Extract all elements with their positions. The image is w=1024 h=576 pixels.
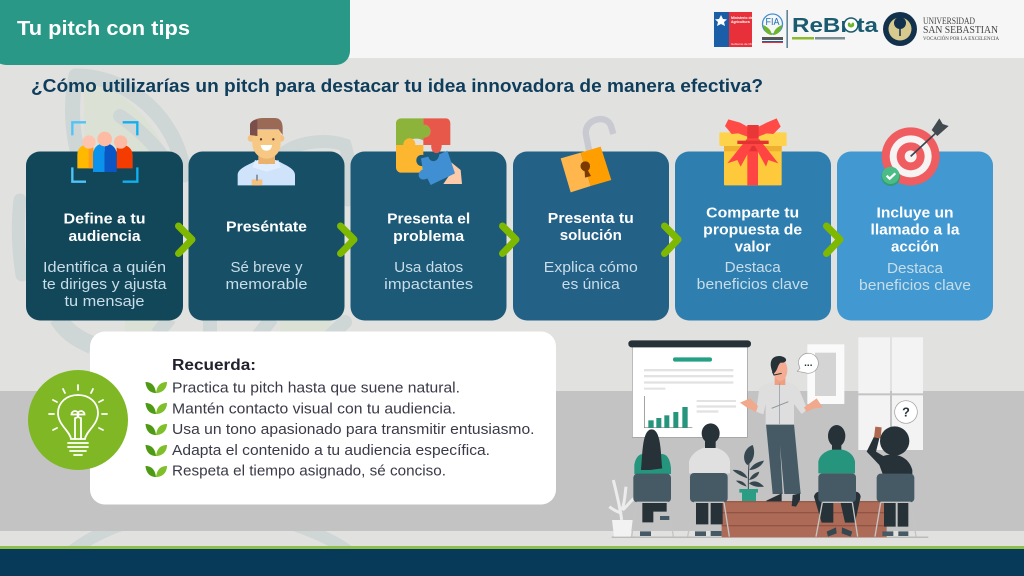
tip 3: Usa un tono apasionado para transmitir entusiasmo. bbox=[172, 422, 534, 438]
card text bbox=[697, 260, 809, 293]
panel: Comparte tu propuesta de valor bbox=[675, 118, 831, 320]
card heading: propuesta de bbox=[703, 222, 802, 238]
main heading: ¿Cómo utilizarías un pitch para destacar tu idea innovadora de manera efectiva? bbox=[31, 76, 763, 96]
logo: Ministerio de Agricultura bbox=[713, 11, 756, 47]
window bbox=[858, 337, 923, 450]
audience member 1 bbox=[632, 429, 673, 537]
card heading: valor bbox=[735, 240, 771, 256]
card heading: solución bbox=[560, 228, 622, 244]
logo: Universidad San Sebastián: VOCACIÓN POR LA EXCELENCIA bbox=[923, 36, 999, 42]
stage bbox=[722, 501, 887, 537]
card heading: Define a tu bbox=[64, 212, 146, 228]
card heading: Comparte tu bbox=[706, 205, 799, 221]
arrow 2 bbox=[340, 226, 354, 254]
card heading: acción bbox=[891, 240, 939, 256]
presenter bbox=[740, 356, 823, 507]
card text bbox=[42, 260, 168, 310]
audience member 3 bbox=[814, 425, 861, 537]
tip 2: Mantén contacto visual con tu audiencia. bbox=[172, 401, 456, 417]
card text: es única bbox=[562, 277, 621, 293]
card text: Destaca bbox=[725, 260, 782, 276]
icon: presenter man bbox=[238, 118, 295, 185]
card heading bbox=[870, 205, 960, 256]
card heading bbox=[703, 205, 802, 256]
logo: FIA bbox=[762, 14, 783, 43]
illustration: presenter and audience bbox=[609, 337, 928, 538]
card heading: Incluye un bbox=[876, 205, 954, 221]
card text bbox=[859, 261, 971, 294]
speech bubble bbox=[797, 353, 818, 373]
panel: Presenta tu solución bbox=[513, 119, 669, 320]
card heading bbox=[64, 212, 146, 245]
center plant bbox=[733, 445, 764, 501]
header tab bbox=[0, 0, 350, 65]
arrow 1 bbox=[178, 226, 192, 254]
icon: target with dart bbox=[881, 118, 949, 186]
card text: tu mensaje bbox=[64, 294, 144, 310]
panel: Incluye un llamado a la acción bbox=[837, 118, 993, 320]
card heading: problema bbox=[393, 229, 465, 245]
card heading: llamado a la bbox=[870, 222, 960, 238]
card text: Identifica a quién bbox=[43, 260, 166, 276]
panel: Recuerda bbox=[28, 332, 556, 504]
question bubble: ? bbox=[902, 405, 910, 419]
icon: light bulb bbox=[28, 370, 128, 470]
card text: Usa datos bbox=[394, 260, 463, 276]
audience member 2 bbox=[688, 423, 730, 537]
arrow 5 bbox=[826, 226, 840, 254]
card text: Explica cómo bbox=[544, 260, 638, 276]
left plant bbox=[609, 480, 634, 537]
panel: Presenta el problema bbox=[350, 118, 506, 320]
tip 4: Adapta el contenido a tu audiencia específica. bbox=[172, 443, 490, 459]
icon: gift box bbox=[719, 118, 787, 185]
logo: Ministerio de Agricultura: Gobierno de Chile bbox=[731, 42, 756, 46]
card heading bbox=[548, 211, 634, 244]
icon: audience bbox=[72, 122, 137, 182]
presentation screen bbox=[628, 340, 751, 437]
card text bbox=[226, 260, 308, 293]
icon: open padlock bbox=[561, 119, 613, 192]
icon: puzzle bbox=[396, 118, 462, 185]
logo: Universidad San Sebastián: UNIVERSIDAD bbox=[923, 16, 975, 26]
card text: beneficios clave bbox=[697, 277, 809, 293]
logo: Ministerio de Agricultura: Ministerio de bbox=[731, 16, 753, 20]
card text: memorable bbox=[226, 277, 308, 293]
card heading: audiencia bbox=[68, 229, 142, 245]
question bubble bbox=[895, 401, 917, 423]
audience member 4 bbox=[867, 426, 916, 537]
card heading: Presenta el bbox=[387, 212, 470, 228]
card text: Destaca bbox=[887, 261, 944, 277]
list heading: Recuerda: bbox=[172, 357, 256, 374]
logo: Ministerio de Agricultura: Agricultura bbox=[731, 20, 750, 24]
logo: FIA: FIA bbox=[766, 17, 780, 28]
logo: Universidad San Sebastián bbox=[883, 12, 999, 46]
logos bbox=[713, 10, 999, 48]
card text bbox=[544, 260, 638, 293]
wall picture bbox=[807, 344, 844, 404]
card text: te diriges y ajusta bbox=[42, 277, 168, 293]
arrow 3 bbox=[502, 226, 516, 254]
panel: Define a tu audiencia bbox=[26, 122, 183, 320]
tab title: Tu pitch con tips bbox=[17, 18, 190, 40]
floor line bbox=[612, 537, 928, 538]
panel: Preséntate bbox=[188, 118, 344, 320]
tip 1: Practica tu pitch hasta que suene natural. bbox=[172, 381, 460, 397]
card heading: Presenta tu bbox=[548, 211, 634, 227]
card text: impactantes bbox=[384, 277, 473, 293]
card heading: Preséntate bbox=[226, 220, 307, 236]
bar chart bbox=[644, 396, 692, 428]
card text: beneficios clave bbox=[859, 278, 971, 294]
tip 5: Respeta el tiempo asignado, sé conciso. bbox=[172, 464, 446, 480]
card text: Sé breve y bbox=[230, 260, 303, 276]
card text bbox=[384, 260, 473, 293]
footer bar bbox=[0, 546, 1024, 576]
card heading bbox=[387, 212, 470, 245]
speech bubble: ... bbox=[804, 358, 813, 369]
logo: Universidad San Sebastián: SAN SEBASTIAN bbox=[923, 25, 998, 36]
arrow 4 bbox=[664, 226, 678, 254]
logo: ReBrota: ReBr ta bbox=[792, 15, 879, 37]
